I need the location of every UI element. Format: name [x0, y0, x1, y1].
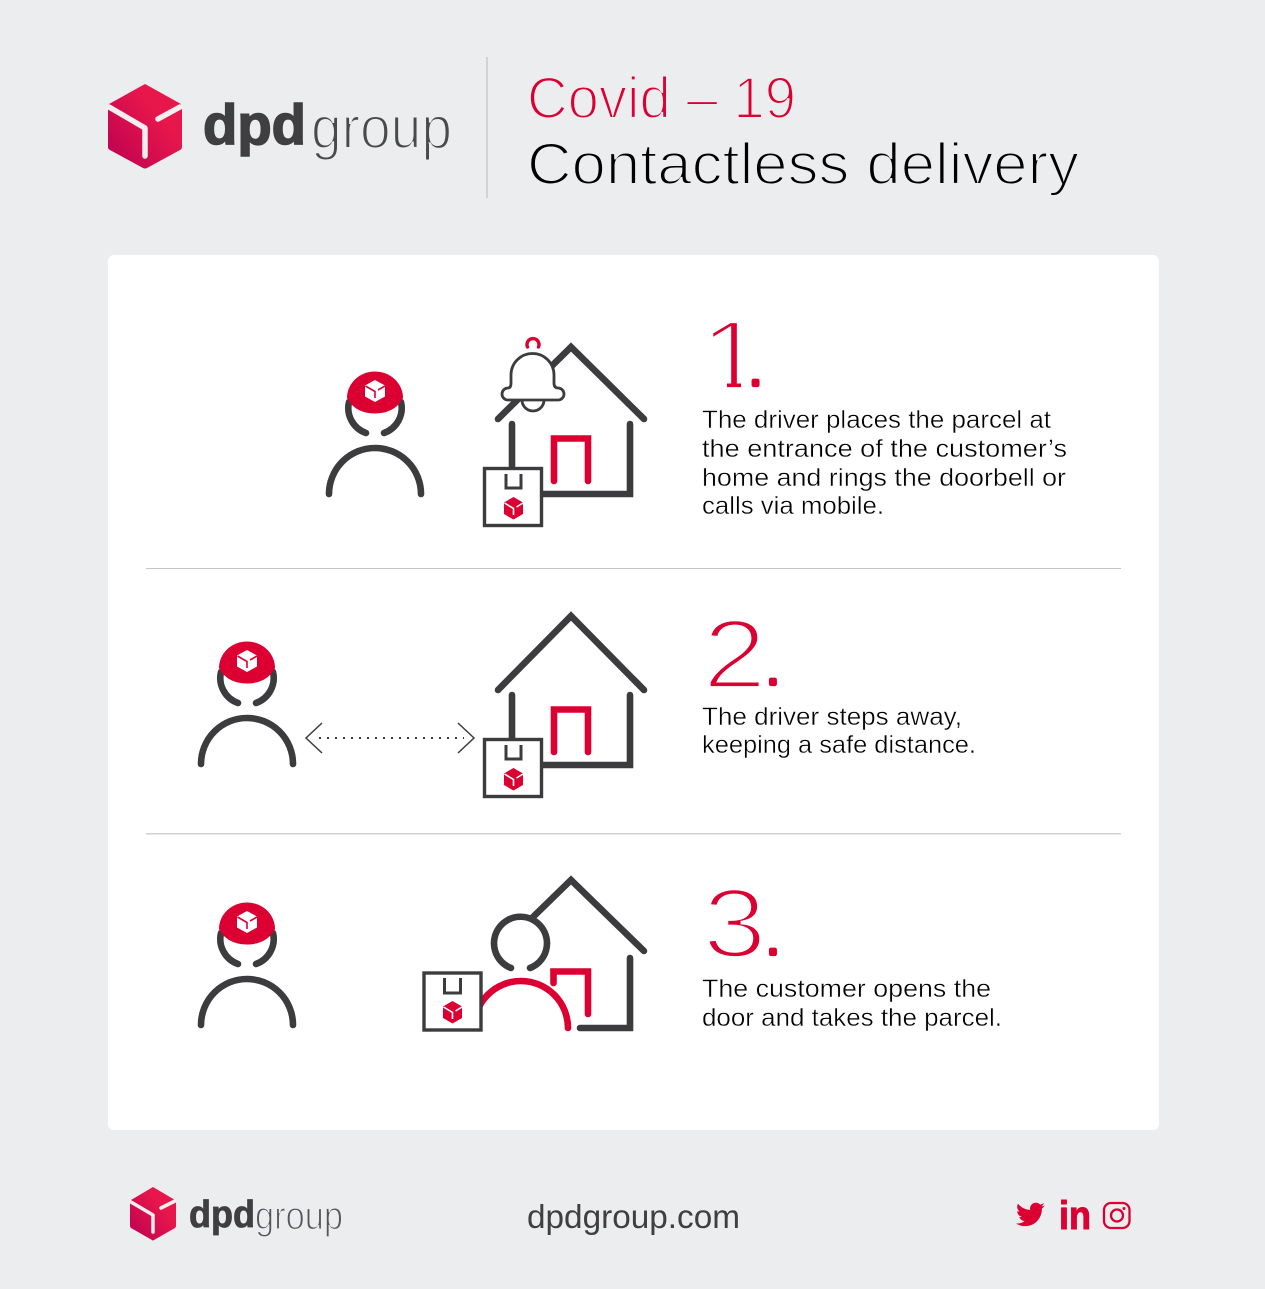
- step 2 text: [702, 703, 976, 759]
- step number 1: .: [750, 350, 761, 394]
- step 1 text: [702, 406, 1067, 520]
- title: Contactless delivery: [527, 132, 1079, 197]
- step number 2: .: [767, 649, 779, 693]
- icon: twitter: [1016, 1203, 1045, 1226]
- website url: dpdgroup.com: [527, 1198, 740, 1235]
- step 1 text: the entrance of the customer’s: [702, 435, 1067, 463]
- arrow: safe distance: [306, 723, 474, 753]
- step 1 text: home and rings the doorbell or: [702, 464, 1066, 492]
- footer wordmark: dpd: [189, 1194, 255, 1236]
- icon: doorbell: [502, 339, 564, 411]
- step 2 text: keeping a safe distance.: [702, 731, 976, 759]
- step number 3: 3: [703, 868, 767, 978]
- logo wordmark: dpd: [203, 93, 306, 157]
- step number 3: .: [767, 919, 779, 963]
- step 2 text: The driver steps away,: [702, 703, 962, 731]
- title: Covid – 19: [527, 66, 796, 131]
- icon: house with parcel and doorbell: [484, 339, 644, 526]
- step number 1: [713, 323, 760, 388]
- logo wordmark: [203, 93, 452, 161]
- icon: driver: [201, 642, 293, 764]
- footer wordmark: group: [255, 1195, 343, 1238]
- title: [527, 66, 1079, 197]
- step 3: [201, 868, 1002, 1032]
- icon: dpd parcel cube small: [130, 1187, 176, 1240]
- icon: house with parcel: [484, 616, 644, 796]
- icon: house with customer and parcel: [424, 880, 644, 1030]
- step 3 text: [702, 975, 1002, 1032]
- icon: instagram: [1104, 1203, 1130, 1228]
- social icons: [1016, 1194, 1130, 1238]
- panel: steps: [108, 255, 1159, 1130]
- icon: driver: [329, 372, 421, 494]
- header logo: dpdgroup: [108, 84, 452, 168]
- step 3 text: door and takes the parcel.: [702, 1004, 1002, 1032]
- footer logo: [130, 1187, 343, 1240]
- step 1 text: The driver places the parcel at: [702, 406, 1051, 434]
- icon: customer: [474, 917, 568, 1028]
- step 1 text: calls via mobile.: [702, 492, 884, 520]
- logo wordmark: group: [311, 95, 452, 161]
- icon: driver: [201, 902, 293, 1025]
- step 3 text: The customer opens the: [702, 975, 991, 1003]
- step number 2: 2: [703, 599, 767, 709]
- footer wordmark: [189, 1194, 343, 1238]
- step 2: [201, 599, 976, 796]
- step 1: [329, 300, 1067, 526]
- icon: dpd parcel cube: [108, 84, 182, 168]
- step number 1: 1: [700, 300, 764, 410]
- icon: linkedin: in: [1059, 1194, 1091, 1238]
